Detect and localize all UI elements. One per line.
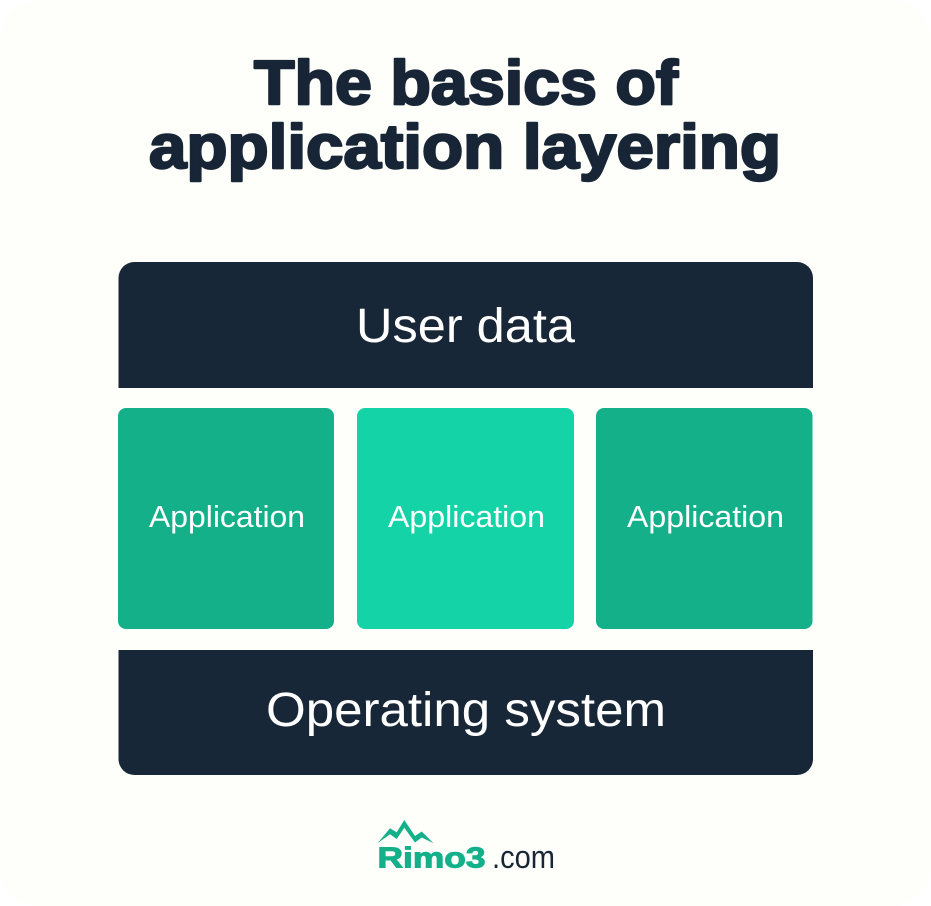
logo: Rimo3.com (378, 820, 555, 875)
title: application layering (149, 113, 781, 182)
panel: user data: User data (356, 300, 575, 353)
panel: operating system: Operating system (266, 684, 666, 737)
logo wordmark: Rimo3 (378, 842, 486, 874)
panel: application 3 (596, 408, 812, 629)
panel: application 1 (118, 408, 334, 629)
panel: user data (118, 262, 813, 388)
title (149, 49, 781, 182)
panel: application 2 (357, 408, 574, 629)
icon: mountain peaks (378, 820, 434, 843)
logo domain: .com (492, 839, 555, 875)
panel: operating system (118, 650, 813, 775)
panel: application 3: Application (627, 499, 784, 534)
panel: application 2: Application (388, 499, 545, 534)
panel: application 1: Application (149, 499, 305, 534)
title: The basics of (254, 49, 678, 118)
